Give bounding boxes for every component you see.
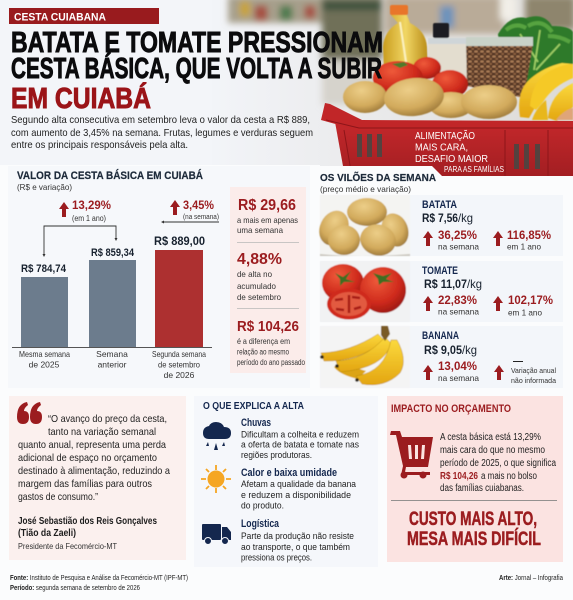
- panel: key figures: [230, 187, 306, 373]
- item: rain: regiões produtoras.: [241, 450, 312, 460]
- chart subheading: (R$ e variação): [17, 182, 72, 192]
- row: tomate: /kg: [467, 277, 482, 291]
- quote text: gastos de consumo.”: [18, 491, 98, 503]
- intro text: [11, 114, 313, 151]
- item: rain: a oferta de batata e tomate nas: [241, 440, 360, 450]
- item: heat: Afetam a qualidade da banana: [241, 479, 356, 489]
- panel: budget impact: [387, 396, 563, 562]
- panel: villains: [314, 171, 563, 388]
- quote text: destinado à alimentação, reduzindo a: [18, 465, 170, 477]
- item: logistics: pressiona os preços.: [241, 552, 312, 562]
- icon: rice bag: [428, 23, 472, 80]
- panel: key figures: é a diferença em: [237, 337, 290, 346]
- white body sheet: [0, 165, 573, 600]
- item: heat: [201, 465, 356, 510]
- icon: sun: [201, 465, 231, 493]
- impact heading: IMPACTO NO ORÇAMENTO: [391, 403, 511, 415]
- item: heat: do produto.: [241, 500, 284, 510]
- panel: key figures: de setembro: [237, 292, 281, 302]
- row: banana: [320, 326, 563, 388]
- quote text: margem das famílias para outros: [18, 478, 152, 490]
- variation annual: 13,29%: [72, 198, 111, 212]
- impact text: R$ 104,26: [440, 471, 478, 482]
- intro text: entre os principais responsáveis pela alta.: [11, 139, 188, 151]
- item: logistics: Parte da produção não resiste: [241, 531, 354, 541]
- icon: tomatoes: [373, 57, 468, 98]
- row: tomate: 102,17%: [508, 293, 553, 307]
- panel: key figures: a mais em apenas: [237, 215, 298, 225]
- icon: tomatoes photo: [320, 261, 410, 322]
- row: tomate: na semana: [438, 306, 479, 316]
- row: batata: /kg: [458, 211, 473, 225]
- panel: key figures: período do ano passado: [237, 358, 305, 367]
- basket caption: [415, 129, 504, 174]
- row: banana: R$ 9,05: [424, 343, 462, 357]
- bar chart: de 2025: [29, 360, 60, 370]
- quote text: adicional de espaço no orçamento: [18, 452, 157, 464]
- arrowheads: [42, 220, 164, 257]
- quote author: José Sebastião dos Reis Gonçalves: [18, 515, 157, 527]
- section tag: [9, 8, 159, 24]
- item: logistics: [202, 518, 354, 562]
- item: rain: Chuvas: [241, 417, 271, 429]
- row: banana: Variação anual: [511, 366, 556, 375]
- panel: key figures: de alta no: [237, 269, 272, 279]
- variation weekly: [170, 198, 219, 221]
- impact text: a mais no bolso: [481, 471, 537, 482]
- source footer: [10, 575, 188, 592]
- bar chart: anterior: [98, 360, 127, 370]
- icon: beans bag: [466, 37, 533, 98]
- icon: quote marks: [17, 402, 42, 424]
- item: rain: [203, 417, 360, 460]
- impact text: das famílias cuiabanas.: [440, 483, 524, 494]
- source footer: Fonte: Instituto de Pesquisa e Análise da Fecomércio-MT (IPF-MT): [10, 575, 188, 582]
- item: logistics: Logística: [241, 518, 280, 530]
- variation annual: [59, 198, 111, 223]
- row: banana: BANANA: [422, 330, 459, 342]
- panel: key figures: R$ 104,26: [237, 318, 299, 335]
- title: EM CUIABÁ: [11, 81, 151, 115]
- icon: oil bottle: [383, 5, 428, 71]
- intro text: com aumento de 3,45% na semana. Frutas, legumes e verduras seguem: [11, 127, 313, 139]
- bar chart: R$ 889,00: [154, 234, 205, 248]
- villains subheading: (preço médio e variação): [320, 184, 411, 194]
- quote author: (Tião da Zaeli): [18, 527, 76, 539]
- panel: quote: [9, 396, 186, 560]
- item: logistics: ao transporte, o que também: [241, 542, 350, 552]
- impact text: [440, 432, 556, 494]
- basket caption: MAIS CARA,: [415, 142, 468, 154]
- row: tomate: 22,83%: [438, 293, 477, 307]
- bar chart: R$ 859,34: [91, 247, 135, 259]
- panel: key figures: R$ 29,66: [238, 197, 296, 214]
- icon: lettuce: [498, 16, 573, 102]
- icon: bananas photo: [320, 326, 410, 388]
- item: rain: Dificultam a colheita e reduzem: [241, 430, 359, 440]
- icon: potatoes photo: [314, 195, 413, 260]
- panel: basket value chart: [8, 166, 310, 388]
- bar chart: [12, 234, 212, 380]
- variation weekly: 3,45%: [183, 198, 214, 212]
- title: BATATA E TOMATE PRESSIONAM: [11, 27, 383, 59]
- panel: key figures: 4,88%: [237, 251, 282, 268]
- row: tomate: R$ 11,07: [424, 277, 467, 291]
- bar chart: R$ 784,74: [21, 263, 67, 275]
- row: tomate: [320, 261, 563, 322]
- quote author: Presidente da Fecomércio-MT: [18, 541, 117, 551]
- icon: shopping cart: [390, 431, 433, 478]
- row: batata: 116,85%: [507, 228, 551, 242]
- left header background: [0, 0, 212, 165]
- panel: key figures: relação ao mesmo: [237, 348, 289, 356]
- row: banana: na semana: [438, 373, 479, 383]
- title: [11, 27, 383, 115]
- quote text: tanto na variação semanal: [48, 426, 156, 438]
- item: heat: Calor e baixa umidade: [241, 467, 337, 479]
- icon: truck: [202, 524, 231, 544]
- row: banana: 13,04%: [438, 359, 477, 373]
- panel: explanations: [194, 396, 378, 567]
- basket caption: PARA AS FAMÍLIAS: [444, 165, 504, 174]
- impact text: A cesta básica está 13,29%: [440, 432, 541, 443]
- panel: key figures: uma semana: [237, 225, 283, 235]
- basket caption: DESAFIO MAIOR: [415, 154, 488, 165]
- bar chart: de 2026: [164, 370, 195, 380]
- variation weekly: (na semana): [183, 214, 219, 221]
- intro text: Segundo alta consecutiva em setembro leva o valor da cesta a R$ 889,: [11, 114, 310, 126]
- icon: rain cloud: [203, 422, 231, 450]
- quote text: [18, 413, 170, 503]
- item: heat: e reduzem a disponibilidade: [241, 490, 351, 500]
- quote author: [18, 515, 157, 551]
- bar chart: Mesma semana: [19, 349, 70, 359]
- grocery items in basket: [343, 5, 573, 121]
- row: banana: /kg: [462, 343, 477, 357]
- section tag: CESTA CUIABANA: [14, 12, 106, 24]
- title: CESTA BÁSICA, QUE VOLTA A SUBIR: [11, 51, 382, 85]
- villains heading: OS VILÕES DA SEMANA: [320, 171, 436, 184]
- explanations heading: O QUE EXPLICA A ALTA: [203, 400, 304, 412]
- row: tomate: TOMATE: [422, 265, 458, 277]
- quote text: quanto anual, representa uma perda: [18, 439, 166, 451]
- row: batata: [314, 195, 563, 260]
- arrow: weekly: [163, 221, 219, 223]
- variation annual: (em 1 ano): [72, 214, 106, 223]
- header photo: supermarket background: [200, 0, 573, 170]
- row: batata: na semana: [438, 242, 479, 252]
- impact slogan: [407, 509, 541, 550]
- panel: key figures: acumulado: [237, 281, 276, 291]
- row: batata: em 1 ano: [507, 242, 541, 252]
- source footer: Período: segunda semana de setembro de 2026: [10, 585, 140, 592]
- bar chart: Segunda semana: [152, 349, 206, 359]
- row: banana: não informada: [511, 376, 557, 385]
- row: tomate: em 1 ano: [508, 308, 542, 318]
- impact text: mais cara do que no mesmo: [440, 445, 545, 456]
- icon: red basket: [321, 103, 573, 177]
- bar chart: de setembro: [158, 360, 200, 370]
- icon: potatoes: [343, 75, 517, 119]
- quote text: “O avanço do preço da cesta,: [48, 413, 167, 425]
- basket caption: ALIMENTAÇÃO: [415, 129, 475, 142]
- chart heading: VALOR DA CESTA BÁSICA EM CUIABÁ: [17, 169, 203, 182]
- row: batata: 36,25%: [438, 228, 477, 242]
- art credit: Arte: Jornal – Infografia: [499, 575, 563, 582]
- row: batata: BATATA: [422, 199, 457, 211]
- arrow: annual bracket: [44, 226, 116, 254]
- icon: bananas: [519, 63, 573, 121]
- row: batata: R$ 7,56: [422, 211, 458, 225]
- bar chart: Semana: [96, 349, 128, 359]
